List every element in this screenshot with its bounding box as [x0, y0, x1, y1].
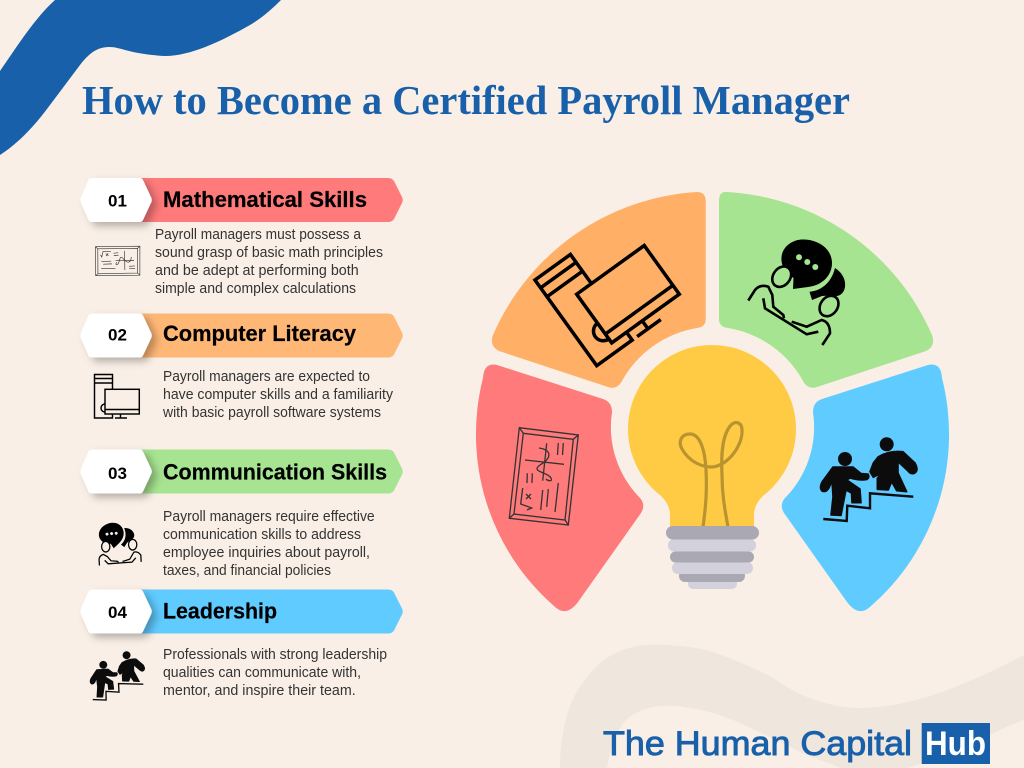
heading: mathematical skills: Mathematical Skills	[163, 187, 367, 212]
text: mathematical skills: simple and complex calculations	[155, 281, 356, 297]
text: communication skills: taxes, and financial policies	[163, 563, 331, 579]
title: How to Become a Certified Payroll Manager	[82, 77, 850, 123]
number badge 04	[80, 590, 152, 634]
number badge 02	[80, 314, 152, 358]
text: mathematical skills	[155, 227, 383, 297]
logo hub: Hub	[925, 725, 986, 763]
icon: math board large	[509, 428, 578, 525]
number badge 01	[80, 178, 152, 222]
heading: computer literacy: Computer Literacy	[163, 321, 357, 346]
number 01: 01	[108, 192, 127, 211]
text: leadership: Professionals with strong leadership	[163, 647, 387, 663]
panel: 01 mathematical skills	[80, 178, 403, 297]
panel: 02 computer literacy	[80, 314, 403, 421]
heading: leadership: Leadership	[163, 598, 277, 623]
text: communication skills: Payroll managers require effective	[163, 509, 375, 525]
segment: conversation (green)	[719, 192, 933, 388]
bulb base	[666, 526, 759, 589]
text: mathematical skills: and be adept at performing both	[155, 263, 359, 279]
number badge 03	[80, 450, 152, 494]
icon: climbing figures large	[820, 437, 917, 521]
icon: climbing figures	[89, 650, 146, 701]
text: leadership: qualities can communicate with,	[163, 665, 361, 681]
decorative blue wave	[0, 0, 281, 155]
logo	[603, 723, 990, 764]
text: mathematical skills: sound grasp of basic math principles	[155, 245, 383, 261]
text: leadership	[163, 647, 387, 699]
banner: communication skills	[130, 450, 403, 494]
number 02: 02	[108, 326, 127, 345]
heading: communication skills: Communication Skills	[163, 459, 387, 484]
panel: 03 communication skills	[80, 450, 403, 583]
text: mathematical skills: Payroll managers must possess a	[155, 227, 362, 243]
icon: computer large	[535, 216, 685, 366]
banner: computer literacy	[130, 314, 403, 358]
icon: computer	[94, 374, 139, 418]
segment: computer (orange)	[492, 192, 706, 388]
icon: conversation	[82, 514, 150, 583]
segment: math (red)	[476, 365, 643, 611]
icon: conversation large	[748, 239, 845, 345]
text: computer literacy: have computer skills and a familiarity	[163, 387, 394, 403]
text: computer literacy: with basic payroll software systems	[162, 405, 381, 421]
logo box	[922, 723, 990, 764]
filament	[680, 423, 742, 527]
text: communication skills: employee inquiries about payroll,	[163, 545, 370, 561]
number 03: 03	[108, 464, 127, 483]
text: communication skills: communication skills to address	[163, 527, 361, 543]
logo wordmark: The Human Capital	[603, 725, 912, 763]
panel: 04 leadership	[80, 590, 403, 701]
banner: leadership	[130, 590, 403, 634]
text: communication skills	[163, 509, 375, 579]
light bulb	[628, 345, 796, 589]
number 04: 04	[108, 603, 127, 622]
banner: mathematical skills	[130, 178, 403, 222]
segment: leadership (blue)	[782, 365, 949, 611]
text: leadership: mentor, and inspire their team.	[163, 683, 356, 699]
icon: math board	[92, 241, 143, 281]
text: computer literacy: Payroll managers are expected to	[163, 369, 370, 385]
text: computer literacy	[162, 369, 394, 421]
decorative bottom wave	[560, 645, 1024, 768]
